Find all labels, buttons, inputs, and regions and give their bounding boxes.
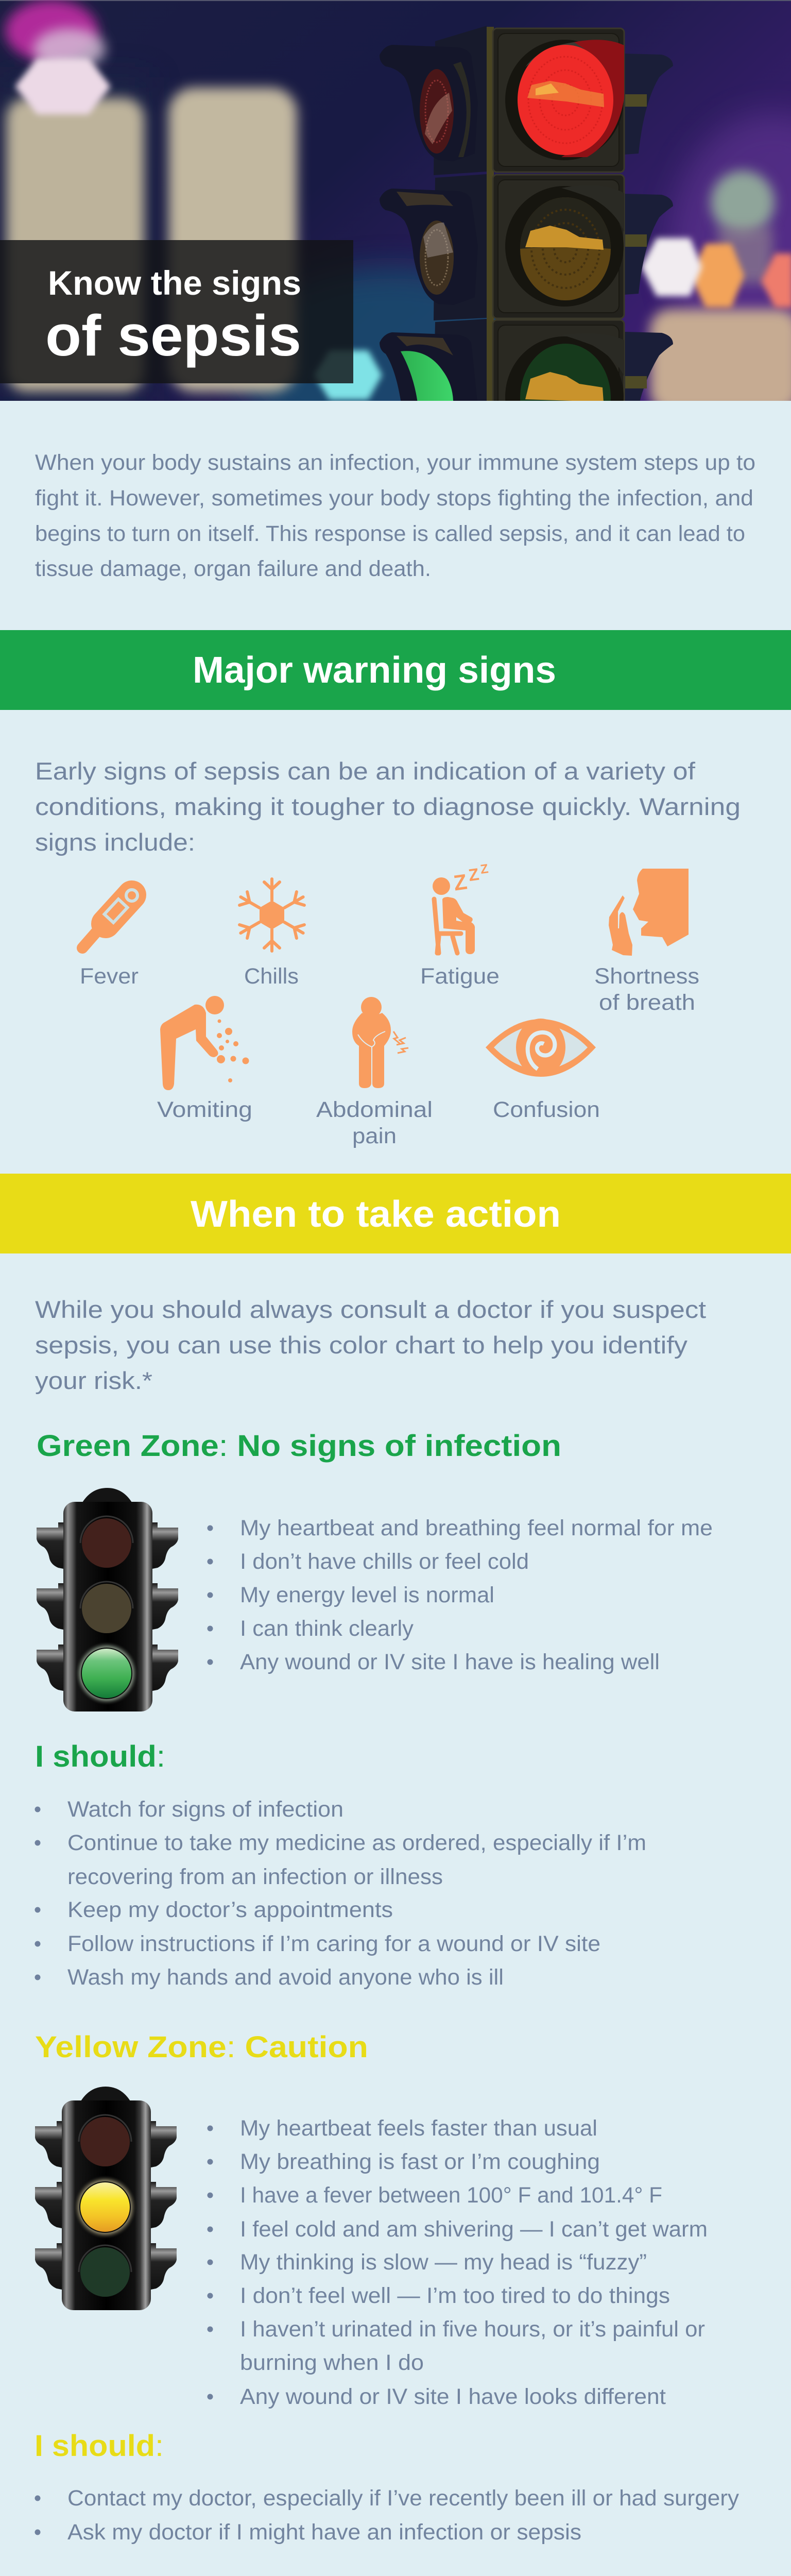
list: yellow zone symptoms: I don’t feel well — I’m too tired to do things	[240, 2283, 670, 2308]
list: green zone actions: Keep my doctor’s appointments	[67, 1897, 393, 1922]
action intro text: While you should always consult a doctor if you suspect	[35, 1296, 706, 1323]
warning signs intro text: conditions, making it tougher to diagnose quickly. Warning	[35, 793, 741, 820]
hero traffic light: front housing	[487, 27, 624, 413]
intro text	[35, 450, 755, 581]
list: green zone symptoms	[207, 1516, 713, 1674]
hero traffic light: left visor yellow	[380, 189, 454, 301]
action intro text: sepsis, you can use this color chart to help you identify	[35, 1331, 688, 1359]
list: green zone actions: Watch for signs of infection	[67, 1797, 343, 1822]
list: yellow zone actions: Ask my doctor if I might have an infection or sepsis	[67, 2520, 581, 2545]
list: yellow zone symptoms: My thinking is slow — my head is “fuzzy”	[240, 2250, 647, 2275]
intro text: When your body sustains an infection, your immune system steps up to	[35, 450, 755, 475]
list: yellow zone symptoms	[207, 2116, 708, 2409]
intro text: fight it. However, sometimes your body stops fighting the infection, and	[35, 486, 753, 511]
icon: traffic light green on	[37, 1488, 178, 1711]
intro text: tissue damage, organ failure and death.	[35, 556, 431, 581]
title line 2: of sepsis	[45, 303, 301, 368]
banner: major warning signs	[0, 630, 791, 710]
hero photo: traffic light at night	[0, 0, 791, 401]
heading: green I should: I should:	[35, 1740, 165, 1773]
label: fever: Fever	[80, 964, 139, 989]
hero traffic light: right visors	[624, 54, 673, 407]
list: yellow zone actions	[35, 2486, 740, 2545]
list: yellow zone symptoms: My breathing is fast or I’m coughing	[240, 2149, 600, 2174]
list: yellow zone symptoms: I have a fever between 100° F and 101.4° F	[240, 2183, 662, 2208]
banner: when to take action: When to take action	[191, 1194, 561, 1235]
list: green zone actions: Follow instructions if I’m caring for a wound or IV site	[67, 1931, 600, 1956]
icon: fatigue seated person: Z	[467, 865, 480, 885]
icon: traffic light yellow on	[35, 2087, 177, 2310]
icon: fatigue seated person: Z	[452, 869, 469, 895]
banner: when to take action	[0, 1174, 791, 1253]
icon: confusion eye	[486, 1019, 596, 1077]
icon: vomiting person	[160, 996, 249, 1090]
label: confusion: Confusion	[493, 1097, 600, 1122]
list: yellow zone symptoms: My heartbeat feels faster than usual	[240, 2116, 597, 2141]
icon: chills snowflake	[237, 879, 307, 951]
warning signs intro text	[35, 757, 741, 856]
action intro text	[35, 1296, 706, 1394]
list: green zone symptoms: My energy level is normal	[240, 1583, 494, 1607]
list: yellow zone symptoms: I feel cold and am shivering — I can’t get warm	[240, 2217, 708, 2242]
list: green zone symptoms: My heartbeat and breathing feel normal for me	[240, 1516, 713, 1540]
hero traffic light: green lens unlit	[505, 336, 624, 401]
warning signs intro text: signs include:	[35, 828, 195, 856]
hero traffic light: left visor red	[380, 45, 471, 158]
label: shortness of breath	[594, 964, 699, 1015]
label: abdominal pain	[316, 1097, 433, 1148]
icon: fatigue seated person	[433, 861, 489, 954]
warning signs intro text: Early signs of sepsis can be an indication of a variety of	[35, 757, 696, 785]
label: shortness of breath: of breath	[599, 990, 695, 1015]
list: green zone symptoms: I don’t have chills or feel cold	[240, 1549, 529, 1574]
hero traffic light: left visor green	[380, 332, 453, 401]
list: green zone symptoms: I can think clearly	[240, 1616, 414, 1641]
list: yellow zone actions: Contact my doctor, especially if I’ve recently been ill or had surgery	[67, 2486, 740, 2511]
list: yellow zone symptoms: I haven’t urinated in five hours, or it’s painful or	[240, 2317, 705, 2342]
hero traffic light: side faces	[434, 26, 487, 402]
icon: fever thermometer	[82, 890, 137, 948]
list: green zone actions: recovering from an infection or illness	[67, 1865, 443, 1889]
list: yellow zone symptoms: burning when I do	[240, 2350, 424, 2375]
icon: shortness of breath	[609, 869, 689, 956]
hero traffic light: amber lens unlit	[505, 185, 624, 307]
label: abdominal pain: pain	[352, 1124, 397, 1148]
heading: yellow zone: Yellow Zone : Caution	[35, 2030, 368, 2064]
icon: abdominal pain	[352, 997, 408, 1088]
list: green zone symptoms: Any wound or IV site I have is healing well	[240, 1650, 660, 1674]
list: green zone actions: Wash my hands and avoid anyone who is ill	[67, 1965, 504, 1990]
intro text: begins to turn on itself. This response is called sepsis, and it can lead to	[35, 521, 745, 546]
title line 1: Know the signs	[48, 264, 301, 302]
label: chills: Chills	[244, 964, 299, 989]
title box	[0, 240, 353, 383]
icon: fatigue seated person: Z	[479, 861, 489, 877]
label: shortness of breath: Shortness	[594, 964, 699, 989]
banner: major warning signs: Major warning signs	[193, 650, 556, 691]
label: vomiting: Vomiting	[157, 1097, 252, 1122]
heading: green zone: Green Zone : No signs of infection	[37, 1429, 561, 1463]
heading: yellow I should: I should:	[35, 2429, 164, 2463]
label: abdominal pain: Abdominal	[316, 1097, 433, 1122]
action intro text: your risk.*	[35, 1367, 152, 1394]
label: fatigue: Fatigue	[420, 964, 500, 989]
list: green zone actions	[35, 1797, 646, 1990]
hero traffic light: red lens lit	[505, 40, 624, 160]
list: green zone actions: Continue to take my medicine as ordered, especially if I’m	[67, 1831, 646, 1855]
list: yellow zone symptoms: Any wound or IV site I have looks different	[240, 2384, 666, 2409]
